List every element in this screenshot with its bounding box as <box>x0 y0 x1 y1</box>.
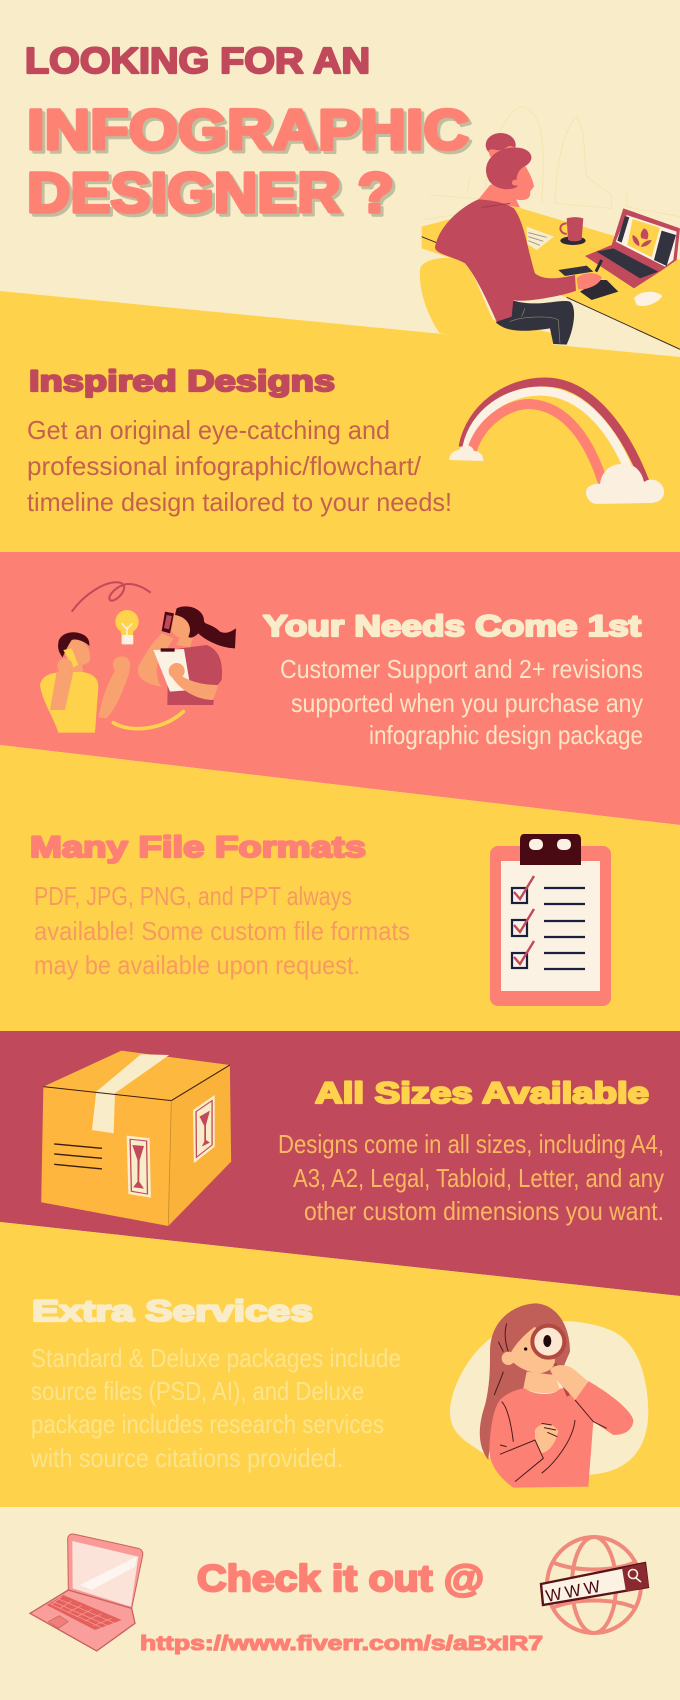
body text <box>27 415 452 517</box>
band: cream <box>0 1507 680 1700</box>
heading: Many File Formats <box>30 831 366 864</box>
band: yellow <box>0 1222 680 1507</box>
icon: rainbow <box>449 382 664 504</box>
desk <box>422 206 680 350</box>
tablet <box>580 280 618 300</box>
icon: globe with www search bar <box>541 1537 649 1633</box>
body text: with source citations provided. <box>30 1443 343 1473</box>
laptop <box>585 208 680 288</box>
band: yellow <box>0 745 680 1031</box>
body text <box>34 881 410 980</box>
link text: https://www.fiverr.com/s/aBxIR7 <box>140 1633 543 1655</box>
heading: check it out: Check it out @ <box>197 1558 484 1599</box>
band: coral <box>0 552 680 825</box>
heading: Extra Services <box>32 1295 313 1328</box>
icon: laptop <box>30 1534 143 1651</box>
panel: extra services <box>0 1222 680 1507</box>
band: yellow <box>0 291 680 552</box>
panel: all sizes available <box>0 1031 680 1296</box>
icon: clipboard checklist <box>490 834 611 1006</box>
illustration: girl with magnifying glass <box>450 1303 648 1488</box>
panel: inspired designs <box>0 291 680 552</box>
title: looking for an: LOOKING FOR AN <box>25 40 370 81</box>
body text: infographic design package <box>369 720 643 750</box>
panel: your needs come 1st <box>0 552 680 825</box>
chair <box>420 258 553 350</box>
paper <box>527 227 554 250</box>
body text: package includes research services <box>31 1409 384 1439</box>
body text <box>280 654 643 750</box>
body text: available! Some custom file formats <box>34 916 410 946</box>
illustration: designer at desk <box>420 107 680 350</box>
heading: All Sizes Available <box>315 1077 649 1110</box>
panel: footer call to action <box>0 1507 680 1700</box>
panel: many file formats <box>0 745 680 1031</box>
icon: globe with www search bar: WWW <box>544 1577 602 1606</box>
body text: timeline design tailored to your needs! <box>27 487 452 517</box>
panel: header background <box>0 0 680 360</box>
hand and pen <box>577 273 602 289</box>
body text <box>278 1129 664 1226</box>
title: infographic designer <box>27 98 469 225</box>
band: crimson <box>0 1031 680 1296</box>
illustration: two people with light bulb <box>40 582 236 733</box>
body text: source files (PSD, AI), and Deluxe <box>31 1376 364 1406</box>
body text: supported when you purchase any <box>291 688 643 718</box>
neck and face <box>477 162 534 207</box>
heading: Your Needs Come 1st <box>263 610 641 643</box>
mouse <box>634 292 662 306</box>
title: infographic designer: INFOGRAPHIC <box>27 98 469 162</box>
hair <box>486 133 516 157</box>
heading: Inspired Designs <box>29 365 335 398</box>
body text <box>30 1343 401 1473</box>
sweater <box>435 199 576 322</box>
body text: may be available upon request. <box>34 950 360 980</box>
body text: professional infographic/flowchart/ <box>27 451 422 481</box>
body text: PDF, JPG, PNG, and PPT always <box>34 881 352 911</box>
body text: Get an original eye-catching and <box>27 415 390 445</box>
mug <box>560 236 586 245</box>
icon: cardboard box <box>41 1051 231 1226</box>
body text: Customer Support and 2+ revisions <box>280 654 643 684</box>
pants <box>496 300 574 345</box>
title: infographic designer: DESIGNER ? <box>27 161 394 225</box>
body text: Standard & Deluxe packages include <box>31 1343 401 1373</box>
